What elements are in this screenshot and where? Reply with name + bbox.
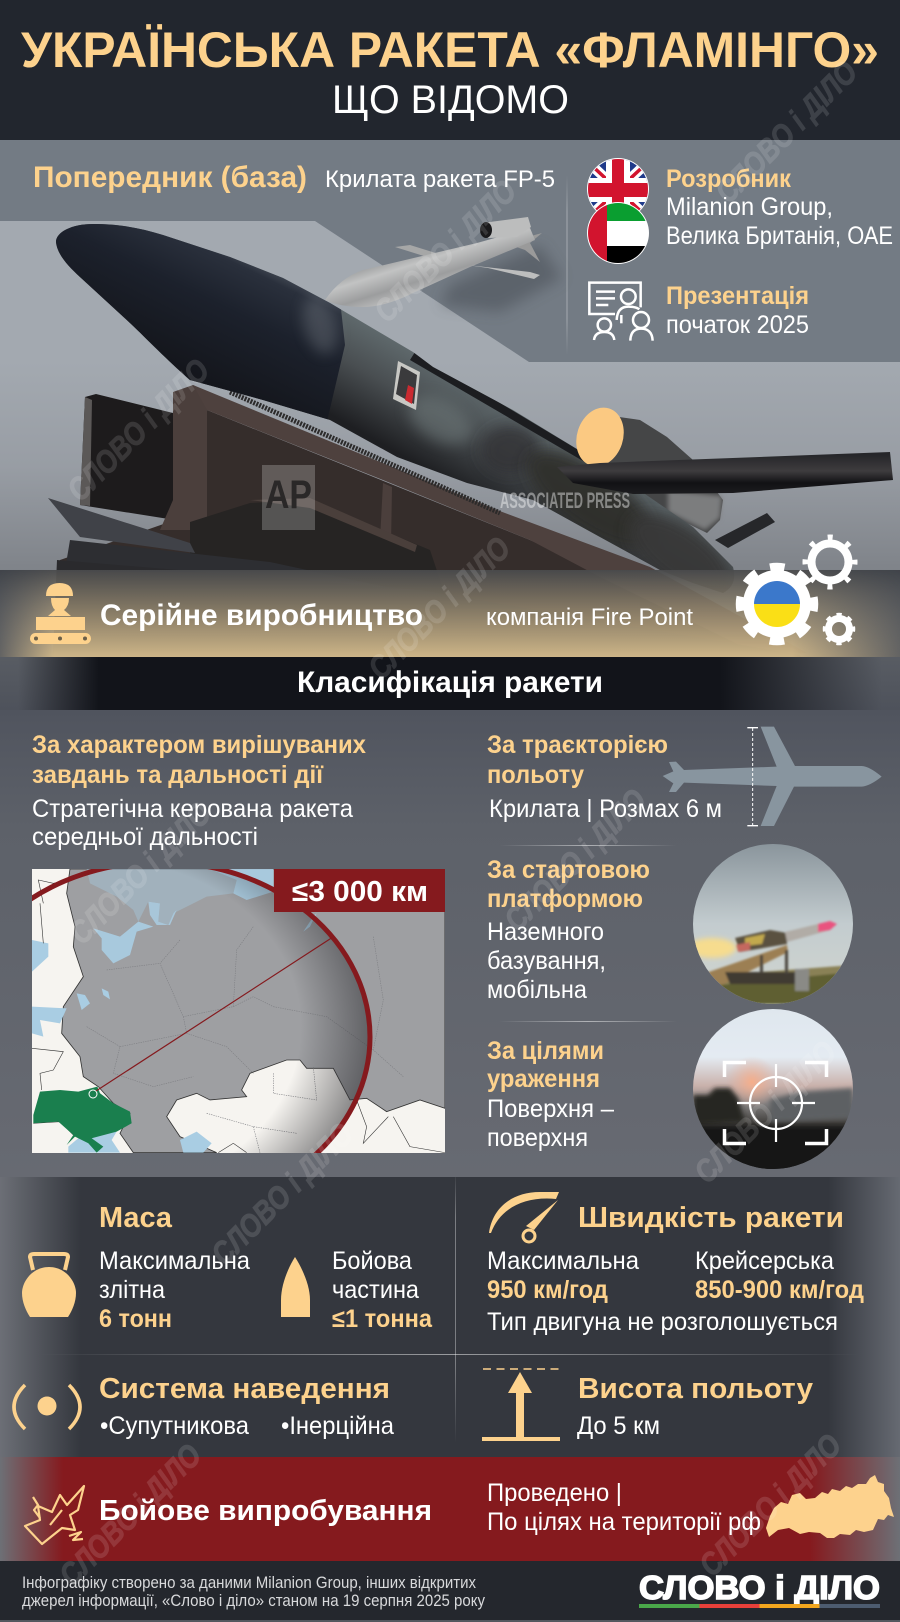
launcher [48, 385, 747, 632]
section: classification left: завдань та дальності дії [32, 761, 324, 789]
developer: Розробник [666, 165, 791, 193]
band: classification heading: Класифікація ракети [297, 666, 603, 699]
block: altitude: До 5 км [577, 1412, 660, 1440]
section: launch platform: За стартовою [487, 856, 650, 884]
watermarks: СЛОВО і ДІЛО [361, 530, 517, 686]
heading: Попередник (база) [33, 161, 307, 194]
icon: altitude arrow [482, 1369, 560, 1441]
block: mass: 6 тонн [99, 1305, 172, 1333]
country borders [32, 880, 445, 1153]
AP watermark: ASSOCIATED PRESS [500, 488, 630, 513]
section: targets: Поверхня – [487, 1095, 614, 1123]
map: range [32, 869, 445, 1153]
icon: signal [14, 1385, 80, 1429]
icon: presentation [589, 283, 653, 341]
missile body [56, 224, 734, 592]
AP watermark: AP [265, 473, 312, 517]
warning plate [393, 361, 420, 410]
section: predecessor [33, 158, 893, 355]
band: serial production [0, 538, 900, 657]
icon: worker on conveyor [30, 583, 91, 644]
section: launch platform: базування, [487, 947, 606, 975]
watermarks: СЛОВО і ДІЛО [687, 1034, 843, 1190]
icon: explosion [25, 1486, 84, 1544]
block: speed: Тип двигуна не розголошується [487, 1308, 838, 1336]
section: trajectory: польоту [487, 761, 584, 789]
icon: gauge [489, 1192, 559, 1242]
company: компанія Fire Point [486, 604, 693, 631]
block: altitude: Висота польоту [578, 1373, 813, 1405]
source text: Інфографіку створено за даними Milanion Group, інших відкритих [22, 1574, 477, 1592]
block: guidance: •Супутникова [100, 1412, 249, 1440]
section: targets: ураження [487, 1065, 600, 1093]
icon: gears [740, 538, 854, 643]
block: speed: Максимальна [487, 1247, 639, 1275]
block: speed: Швидкість ракети [578, 1202, 844, 1234]
section: classification left: За характером вирішуваних [32, 731, 366, 759]
watermarks: СЛОВО і ДІЛО [62, 795, 218, 951]
wing [557, 452, 893, 494]
heading: Серійне виробництво [100, 599, 423, 632]
section: trajectory: Крилата | Розмах 6 м [489, 795, 722, 823]
block: altitude [482, 1369, 813, 1441]
heading: Бойове випробування [99, 1495, 432, 1527]
section: targets: поверхня [487, 1124, 588, 1152]
section: targets [487, 1009, 853, 1173]
header [0, 0, 900, 140]
band: combat test [0, 1457, 900, 1561]
FP-5 small missile [325, 217, 562, 312]
block: speed [487, 1192, 864, 1336]
watermarks: СЛОВО і ДІЛО [367, 173, 523, 329]
block: mass: Маса [99, 1202, 173, 1234]
watermarks: СЛОВО і ДІЛО [708, 54, 864, 210]
water [87, 869, 237, 925]
block: guidance [14, 1373, 394, 1440]
icon: warhead [281, 1257, 310, 1317]
icon: missile silhouette [663, 727, 882, 826]
presentation date: Презентація [666, 282, 809, 310]
footer: джерел інформації, «Слово і діло» станом на 19 серпня 2025 року [22, 1592, 486, 1610]
subtitle: ЩО ВІДОМО [332, 78, 569, 122]
rear upper body [590, 416, 723, 533]
test text: Проведено | [487, 1479, 622, 1507]
section: classification left: Стратегічна керована ракета [32, 795, 353, 823]
range label: ≤3 000 км [292, 876, 428, 908]
block: guidance: •Інерційна [281, 1412, 394, 1440]
footer [0, 1561, 900, 1622]
block: mass: ≤1 тонна [332, 1305, 433, 1333]
section: classification left: середньої дальності [32, 823, 258, 851]
orange end cap [569, 401, 631, 473]
russia territory [62, 869, 445, 1153]
AP watermark [262, 465, 630, 530]
section: launch platform [487, 844, 853, 1004]
watermarks: СЛОВО і ДІЛО [60, 352, 216, 508]
block: mass [22, 1202, 433, 1333]
watermarks: СЛОВО і ДІЛО [692, 1427, 848, 1583]
predecessor value: Крилата ракета FP-5 [325, 166, 555, 193]
band: classification heading [0, 657, 900, 710]
block: speed: 950 км/год [487, 1276, 608, 1304]
logo: СЛОВО і ДІЛО [639, 1569, 880, 1606]
block: mass: злітна [99, 1276, 165, 1304]
section: trajectory [487, 727, 882, 826]
photo: launch [688, 844, 853, 1004]
block: speed: Крейсерська [695, 1247, 834, 1275]
section: predecessor: початок 2025 [666, 311, 809, 339]
regional borders [87, 927, 403, 1153]
block: mass: Бойова [332, 1247, 412, 1275]
main missile photo [56, 224, 893, 592]
section: launch platform: мобільна [487, 976, 587, 1004]
icon: UK flag [587, 158, 649, 211]
section: technical specs [0, 1177, 900, 1457]
icon: russia silhouette [766, 1475, 894, 1538]
section: classification left [32, 731, 366, 851]
range label [274, 869, 445, 912]
icon: reticle [724, 1062, 826, 1144]
ukraine [33, 1087, 132, 1153]
section: launch platform: платформою [487, 885, 643, 913]
photo: target [693, 1009, 853, 1173]
section: targets: За цілями [487, 1037, 604, 1065]
watermarks: СЛОВО і ДІЛО [52, 1437, 208, 1593]
block: mass: частина [332, 1276, 419, 1304]
section: predecessor: Milanion Group, [666, 193, 833, 221]
section backgrounds [0, 140, 900, 1177]
section: trajectory: За траєкторією [487, 731, 668, 759]
tail fin [715, 513, 775, 548]
band: combat test: По цілях на території рф [487, 1508, 761, 1536]
block: mass: Максимальна [99, 1247, 250, 1275]
title: УКРАЇНСЬКА РАКЕТА «ФЛАМІНГО» [21, 22, 879, 78]
section: launch platform: Наземного [487, 918, 604, 946]
icon: kettlebell [22, 1254, 76, 1317]
block: speed: 850-900 км/год [695, 1276, 864, 1304]
watermarks: СЛОВО і ДІЛО [497, 782, 653, 938]
block: guidance: Система наведення [99, 1373, 390, 1405]
icon: UAE flag [587, 202, 649, 264]
watermarks: СЛОВО і ДІЛО [204, 1116, 360, 1272]
